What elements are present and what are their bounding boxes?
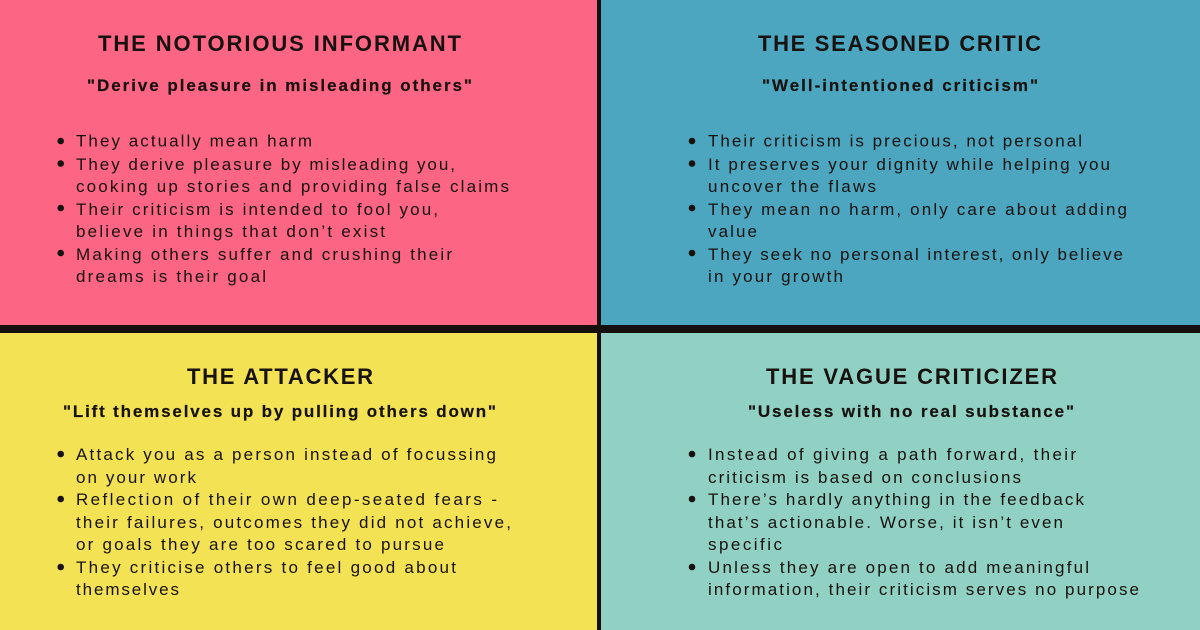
bullet list: criticizer traits: that’s actionable. Worse, it isn’t even <box>708 513 1063 532</box>
bullet list: informant traits: Their criticism is intended to fool you, <box>76 200 438 219</box>
bullet list: critic traits: They mean no harm, only care about adding <box>708 200 1127 219</box>
heading: the notorious informant: THE NOTORIOUS INFORMANT <box>98 31 462 56</box>
bullet list: informant traits <box>57 132 509 286</box>
panel: the vague criticizer <box>601 333 1200 630</box>
bullet list: informant traits: They derive pleasure by misleading you, <box>76 155 455 174</box>
heading: the vague criticizer: THE VAGUE CRITICIZER <box>766 364 1057 389</box>
bullet list: critic traits: They seek no personal interest, only believe <box>708 245 1123 264</box>
panel: the notorious informant <box>0 0 597 325</box>
panel: the attacker <box>0 333 597 630</box>
heading: the attacker: THE ATTACKER <box>187 364 373 389</box>
bullet list: attacker traits: their failures, outcomes they did not achieve, <box>76 513 511 532</box>
bullet list: critic traits: in your growth <box>708 267 843 286</box>
bullet list: criticizer traits <box>689 445 1139 599</box>
quote: well-intentioned: "Well-intentioned criticism" <box>762 76 1038 95</box>
bullet list: attacker traits: Reflection of their own deep-seated fears - <box>76 490 497 509</box>
quote: useless: "Useless with no real substance" <box>748 402 1074 421</box>
bullet list: criticizer traits: information, their criticism serves no purpose <box>708 580 1139 599</box>
bullet list: critic traits <box>689 132 1127 286</box>
bullet list: criticizer traits: Unless they are open to add meaningful <box>708 558 1089 577</box>
heading: the seasoned critic: THE SEASONED CRITIC <box>758 31 1041 56</box>
bullet list: critic traits: Their criticism is precious, not personal <box>708 132 1082 150</box>
bullet list: informant traits: dreams is their goal <box>76 267 266 286</box>
bullet list: informant traits: They actually mean harm <box>76 132 312 150</box>
bullet list: informant traits: Making others suffer and crushing their <box>76 245 452 264</box>
bullet list: attacker traits: They criticise others to feel good about <box>76 558 456 577</box>
bullet list: informant traits: cooking up stories and providing false claims <box>76 177 509 196</box>
bullet list: criticizer traits: Instead of giving a path forward, their <box>708 445 1076 464</box>
bullet list: criticizer traits: criticism is based on conclusions <box>708 468 1021 487</box>
bullet list: attacker traits: or goals they are too scared to pursue <box>76 535 444 554</box>
bullet list: criticizer traits: There’s hardly anything in the feedback <box>708 490 1084 509</box>
quote: lift themselves: "Lift themselves up by pulling others down" <box>63 402 496 421</box>
bullet list: attacker traits: on your work <box>76 468 196 487</box>
bullet list: critic traits: value <box>708 222 757 241</box>
bullet list: critic traits: It preserves your dignity while helping you <box>708 155 1110 174</box>
bullet list: criticizer traits: specific <box>708 535 782 554</box>
bullet list: attacker traits: themselves <box>76 580 179 599</box>
quote: derive pleasure: "Derive pleasure in misleading others" <box>87 76 472 95</box>
bullet list: attacker traits: Attack you as a person instead of focussing <box>76 445 496 464</box>
bullet list: informant traits: believe in things that don’t exist <box>76 222 385 241</box>
bullet list: attacker traits <box>57 445 511 599</box>
bullet list: critic traits: uncover the flaws <box>708 177 876 196</box>
panel: the seasoned critic <box>601 0 1200 325</box>
